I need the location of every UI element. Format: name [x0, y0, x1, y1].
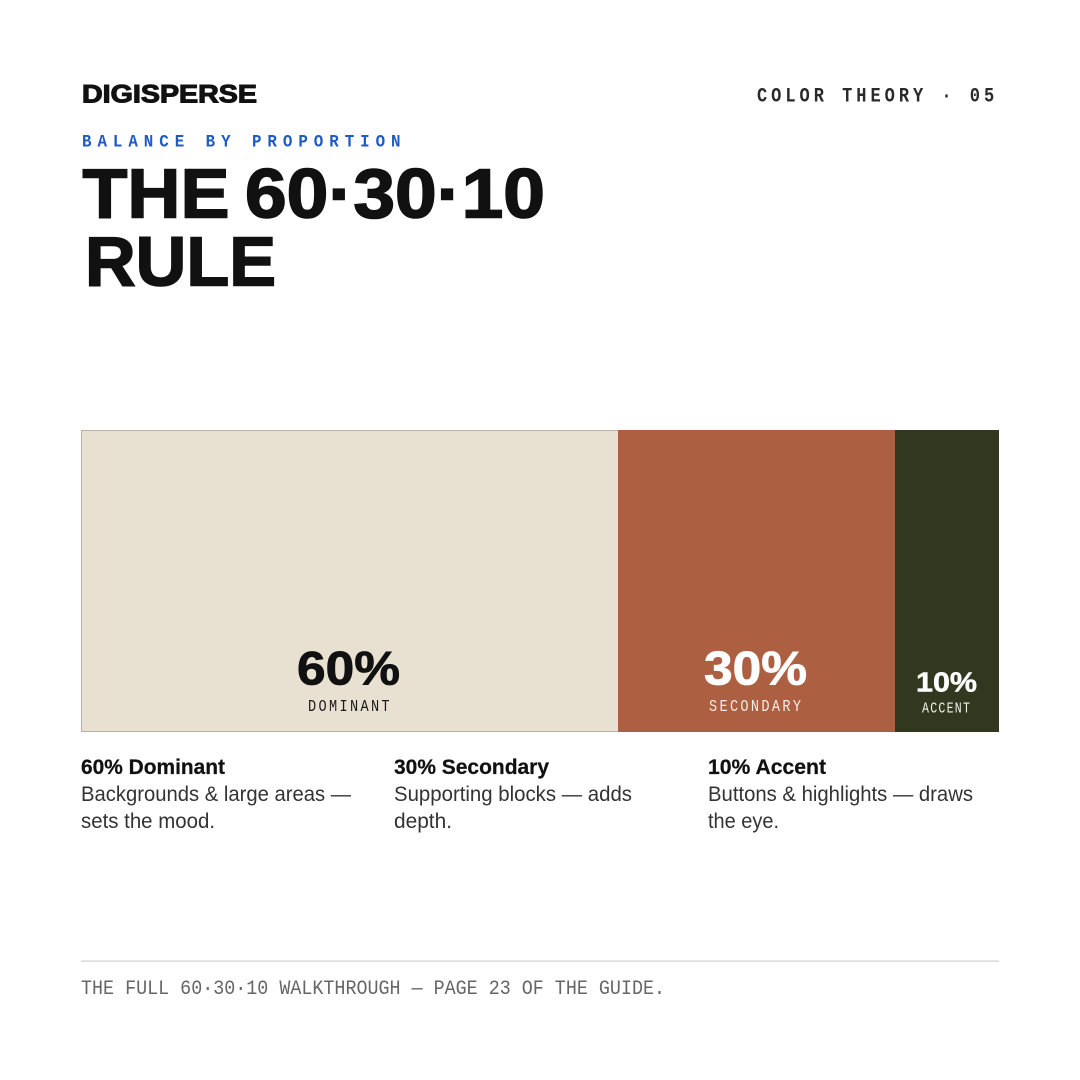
segment: 60% dominant: DOMINANT: [308, 697, 390, 717]
caption: 10% accent: [708, 756, 973, 833]
caption: 30% secondary: Supporting blocks — adds: [394, 782, 632, 806]
series label: COLOR THEORY · 05: [757, 85, 994, 108]
caption: 10% accent: Buttons & highlights — draws: [708, 782, 973, 806]
caption: 60% dominant: sets the mood.: [81, 809, 215, 833]
title: 60·30·10: [245, 154, 545, 232]
caption: 30% secondary: depth.: [394, 809, 452, 833]
eyebrow: BALANCE BY PROPORTION: [82, 133, 401, 153]
caption: 30% secondary: 30% Secondary: [394, 756, 549, 779]
footer note: THE FULL 60·30·10 WALKTHROUGH — PAGE 23 OF THE GUIDE.: [81, 978, 665, 1001]
segment: 30% secondary: [618, 430, 895, 732]
caption: 60% dominant: [81, 756, 351, 833]
title: [82, 154, 545, 300]
caption: 10% accent: the eye.: [708, 809, 779, 833]
caption: 30% secondary: [394, 756, 632, 833]
title: THE: [82, 154, 230, 232]
title: RULE: [85, 222, 276, 300]
caption: 60% dominant: Backgrounds & large areas —: [81, 782, 351, 806]
proportion bar: [82, 430, 999, 732]
brand wordmark: DIGISPERSE: [82, 80, 257, 108]
segment: 60% dominant: 60%: [297, 642, 400, 694]
segment: 10% accent: 10%: [916, 666, 977, 698]
segment: 10% accent: [895, 430, 999, 732]
caption: 10% accent: 10% Accent: [708, 756, 826, 779]
caption: 60% dominant: 60% Dominant: [81, 756, 225, 779]
segment: 10% accent: ACCENT: [922, 700, 970, 717]
segment: 60% dominant: [82, 430, 618, 732]
segment: 30% secondary: 30%: [704, 642, 807, 694]
segment: 30% secondary: SECONDARY: [709, 697, 801, 717]
